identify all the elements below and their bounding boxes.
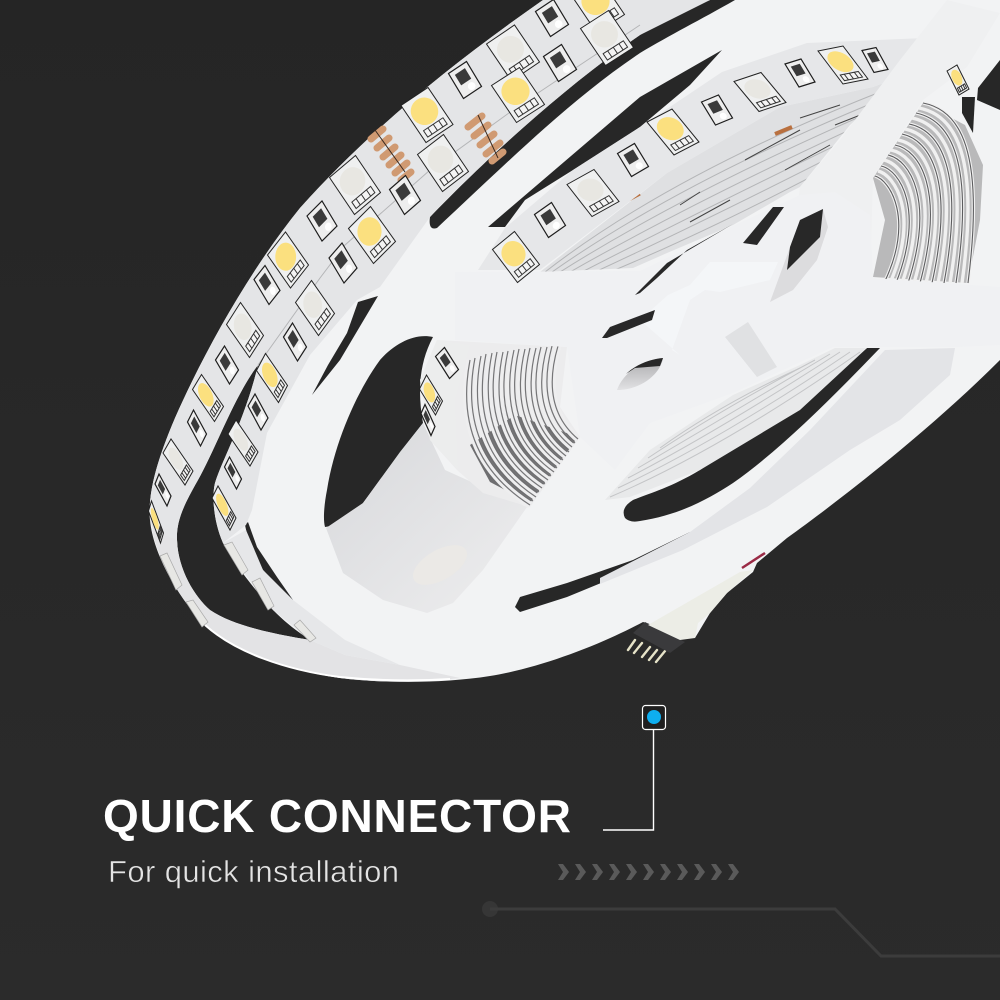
hub square recess bbox=[725, 322, 777, 377]
inner back plate bbox=[326, 423, 527, 613]
inner LED strip bbox=[478, 38, 925, 270]
connector pins bbox=[628, 640, 665, 662]
leader line bbox=[603, 730, 654, 830]
connector housing bbox=[633, 622, 685, 653]
plate highlight bbox=[407, 537, 473, 593]
subtitle: For quick installation bbox=[108, 854, 399, 889]
wires bbox=[742, 553, 765, 568]
hole: right leaf bbox=[770, 209, 828, 302]
connector bbox=[628, 553, 765, 662]
LEDs and resistors: inner strip bbox=[492, 46, 969, 282]
LEDs and resistors: outer strip bbox=[148, 0, 624, 543]
chevron row bbox=[558, 864, 739, 880]
slot: thin arc bbox=[635, 224, 733, 295]
coil dark shadows bbox=[470, 415, 578, 503]
dark gaps between strip and reel bbox=[177, 0, 1000, 640]
left coil stack bbox=[420, 340, 580, 507]
hub centre cross highlight bbox=[640, 262, 778, 355]
second copper contact on coil bbox=[625, 194, 640, 202]
rim inner grey band bbox=[600, 348, 955, 584]
lower coil stack bbox=[605, 348, 867, 500]
left coil end strip bbox=[420, 340, 470, 470]
strip body outer bbox=[150, 0, 710, 560]
circuit line decoration bbox=[482, 901, 1000, 956]
hole: left leaf bbox=[617, 358, 663, 390]
title: QUICK CONNECTOR bbox=[103, 790, 571, 842]
marker box bbox=[642, 706, 666, 730]
copper solder pads bbox=[371, 115, 503, 180]
reel silhouette bbox=[150, 0, 1000, 682]
crinkled strip end pieces bbox=[160, 542, 316, 642]
strip tail bbox=[152, 530, 460, 682]
marker dot bbox=[647, 710, 661, 724]
hub holes bbox=[602, 207, 828, 390]
reel spoke: horizontal and hub bbox=[455, 192, 1000, 470]
copper contact on coil bbox=[775, 127, 792, 134]
LEDs and resistors: second strip bbox=[212, 10, 634, 530]
reel with LED strip photo bbox=[148, 0, 1000, 682]
slot: left bbox=[602, 310, 655, 338]
strip separator line bbox=[258, 25, 640, 365]
reel spoke: diagonal bbox=[790, 0, 1000, 280]
LEDs: left coil bbox=[420, 348, 458, 436]
top coil stack bbox=[541, 84, 882, 272]
second strip tail bbox=[223, 530, 400, 665]
strip tail lower edge line bbox=[205, 625, 450, 680]
connector wire cover bbox=[648, 570, 753, 640]
callout marker bbox=[603, 706, 666, 830]
right coil stack bbox=[873, 103, 983, 283]
slot: upper bbox=[743, 207, 784, 245]
